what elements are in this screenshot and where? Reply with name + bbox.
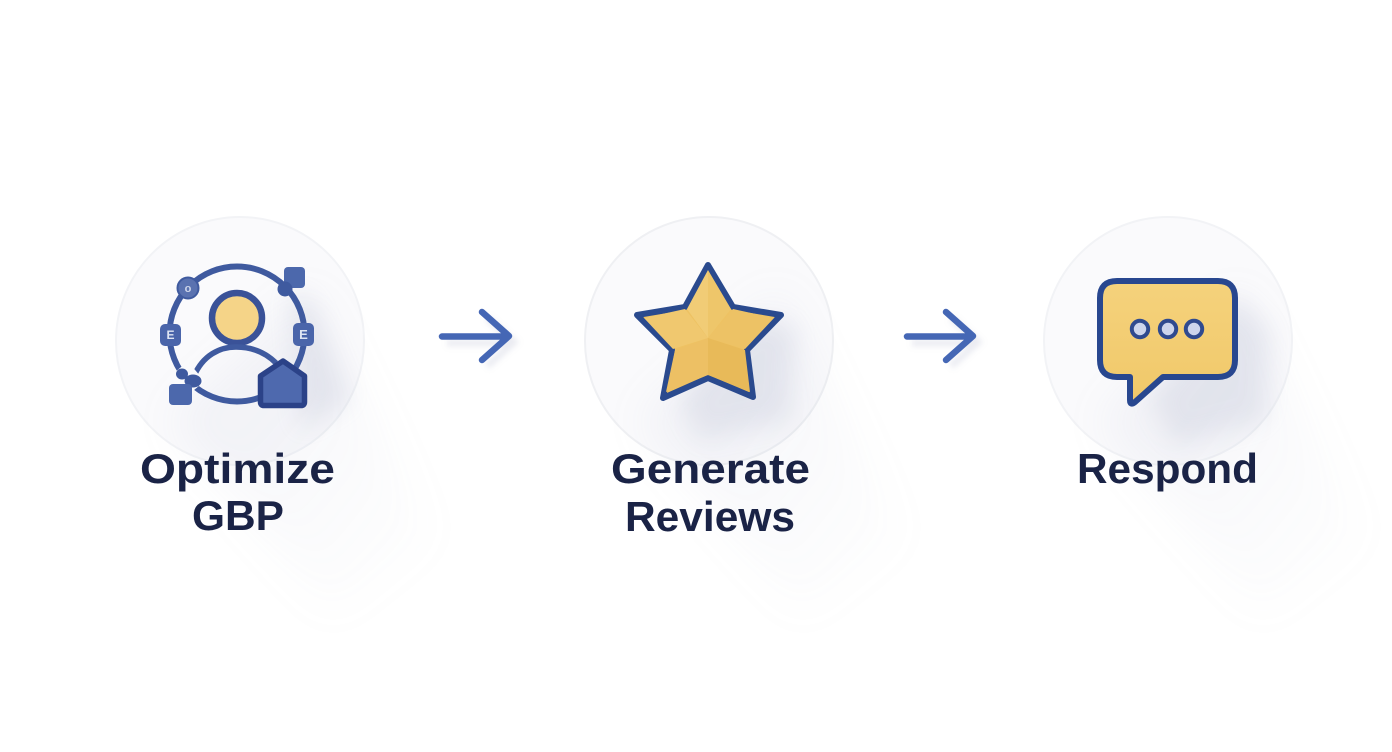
long shadow 1 (170, 290, 440, 620)
dots (1132, 321, 1202, 337)
badge top-left (178, 278, 198, 298)
badge top-left: o (185, 283, 192, 295)
long shadow 2 (640, 290, 910, 620)
circle 2 (585, 217, 833, 465)
icon: profile ring with badges and house (160, 266, 350, 430)
icon: speech bubble (1100, 281, 1270, 445)
long shadow 3 (1100, 290, 1370, 620)
badge bottom-left (169, 361, 205, 405)
step 1: Optimize GBP (116, 217, 440, 620)
label: Optimize GBP: GBP (192, 492, 284, 539)
circle 1 (116, 217, 364, 465)
ring (170, 266, 304, 402)
badge top-right (278, 267, 305, 296)
label: Optimize GBP: Optimize (140, 445, 335, 492)
label: Respond: Respond (1077, 445, 1258, 492)
circle 3 (1044, 217, 1292, 465)
badge left: E (166, 328, 175, 342)
arrow 2 (907, 312, 978, 366)
step 2: Generate Reviews (585, 217, 910, 620)
label: Optimize GBP (140, 445, 335, 539)
arrow 1 (442, 312, 514, 366)
avatar head (212, 293, 262, 343)
badge right: E (299, 327, 308, 342)
badge left (160, 324, 181, 346)
step 3: Respond (1044, 217, 1370, 620)
badge right (293, 323, 314, 346)
avatar body (194, 347, 276, 376)
label: Generate Reviews: Reviews (625, 493, 795, 540)
icon: star (637, 265, 795, 440)
icon: house (260, 361, 304, 406)
label: Generate Reviews (611, 445, 810, 540)
label: Generate Reviews: Generate (611, 445, 810, 492)
star facets (644, 270, 774, 392)
